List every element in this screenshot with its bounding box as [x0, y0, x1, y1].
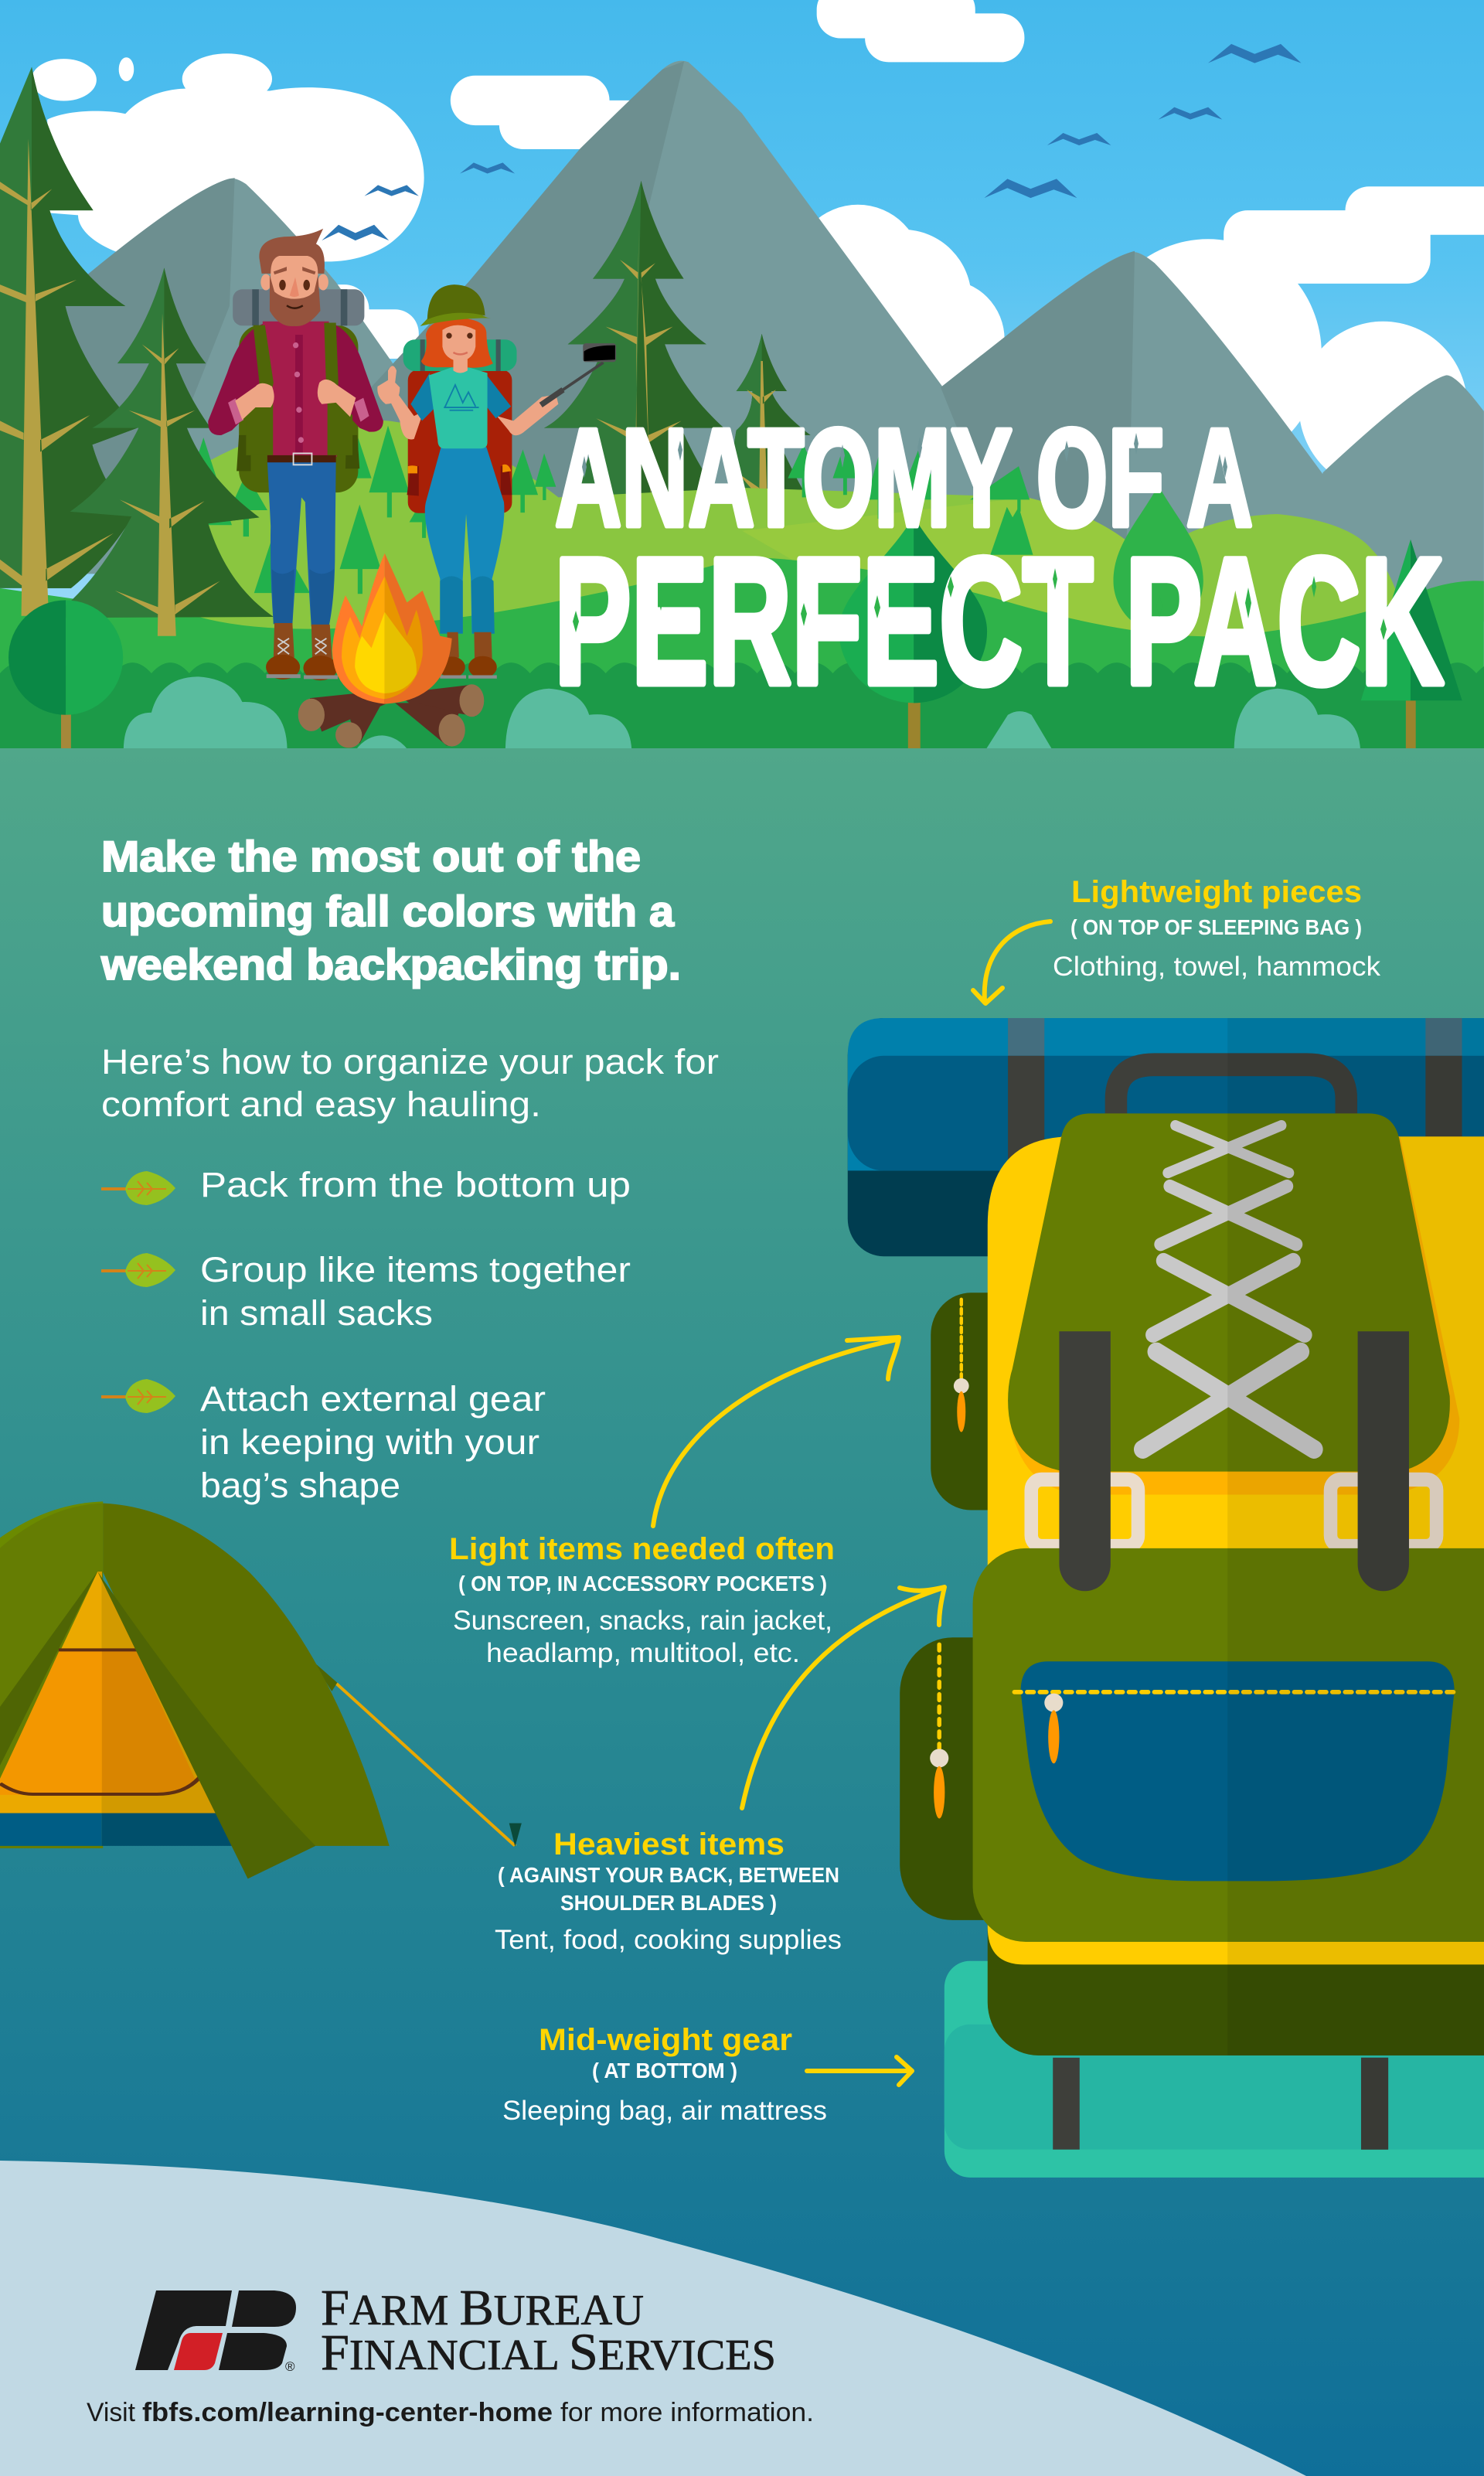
woman t-shirt [410, 367, 511, 448]
hero scene [0, 0, 1484, 755]
bullet 3 text: bag’s shape [200, 1466, 400, 1505]
hiker: woman [377, 284, 616, 679]
intro heading: Make the most out of the [101, 832, 641, 880]
callout: light items: ( ON TOP, IN ACCESSORY POCKETS ) [458, 1572, 827, 1596]
bullet 3 leaf [101, 1379, 175, 1413]
arrow: lightweight pieces [973, 921, 1050, 1003]
arrow: mid-weight gear [807, 2057, 912, 2085]
tent [0, 1501, 522, 1878]
Farm Bureau wordmark: FINANCIAL SERVICES [321, 2322, 776, 2381]
callout: heaviest items: SHOULDER BLADES ) [560, 1891, 777, 1915]
intro heading: weekend backpacking trip. [100, 940, 681, 989]
bullet 3 text: Attach external gear [200, 1379, 546, 1419]
callout: mid-weight gear: Mid-weight gear [539, 2023, 792, 2057]
intro heading [100, 832, 681, 989]
drop-shaped and triangle trees [839, 485, 1462, 750]
callout: lightweight pieces [1053, 875, 1381, 982]
tent floor [0, 1814, 102, 1846]
man jeans [267, 461, 336, 626]
man forearms, hands and straps [235, 323, 356, 455]
tent guy line and peg [311, 1660, 522, 1847]
footer light curve [0, 2161, 1306, 2476]
man shirt and arms [208, 322, 383, 457]
callout: light items: Light items needed often [449, 1532, 835, 1566]
tent flaps [0, 1572, 315, 1878]
callout: lightweight pieces: Clothing, towel, hammock [1053, 952, 1381, 982]
flap shadow [1010, 1136, 1459, 1494]
log ends [298, 684, 484, 748]
woman boots [439, 632, 497, 679]
mountains [0, 61, 1484, 622]
far pine trees [522, 181, 838, 552]
intro text [101, 1042, 719, 1124]
intro text: comfort and easy hauling. [101, 1085, 541, 1124]
clouds [31, 0, 1484, 492]
sleeping bag mat [945, 1961, 1484, 2178]
arrow: heaviest items [742, 1587, 945, 1808]
man boots [266, 623, 338, 680]
tent body [0, 1501, 103, 1572]
bushes [124, 676, 1360, 750]
woman head [421, 318, 493, 373]
lacing [1143, 1126, 1314, 1449]
arrow: light items [653, 1337, 899, 1526]
pack base [988, 1871, 1484, 2055]
callout: lightweight pieces: ( ON TOP OF SLEEPING BAG ) [1070, 915, 1362, 939]
callout: heaviest items: Tent, food, cooking supplies [495, 1925, 842, 1955]
callout: mid-weight gear: ( AT BOTTOM ) [592, 2059, 737, 2083]
body gradient panel [0, 748, 1484, 2476]
man backpack [239, 325, 358, 492]
bullet 3 text: in keeping with your [200, 1422, 539, 1462]
callout: heaviest items [495, 1827, 842, 1955]
intro text: Here’s how to organize your pack for [101, 1042, 719, 1081]
woman trousers [425, 447, 504, 634]
pine tree second [49, 267, 274, 636]
scalloped shrub line [0, 662, 1484, 755]
Farm Bureau wordmark [321, 2280, 776, 2381]
woman hat [420, 284, 491, 326]
campfire [298, 553, 484, 748]
zip pocket [1014, 1661, 1455, 1881]
callout: mid-weight gear [502, 2023, 827, 2126]
top handle [1116, 1064, 1346, 1126]
footer call to action: for more information. [560, 2398, 814, 2427]
man belt [267, 453, 336, 465]
lower side pocket [900, 1637, 1070, 1920]
pack body [988, 1136, 1484, 1964]
woman backpack [408, 370, 512, 513]
tent doorway [0, 1572, 217, 1814]
intro heading: upcoming fall colors with a [101, 887, 675, 935]
footer call to action: Visit [87, 2398, 136, 2427]
logs [310, 685, 475, 746]
foreground meadow [0, 557, 1484, 755]
callout: heaviest items: ( AGAINST YOUR BACK, BETWEEN [498, 1863, 839, 1887]
legs [1053, 2058, 1388, 2150]
title [554, 400, 1444, 722]
woman arms [388, 392, 558, 439]
hills [180, 420, 1410, 641]
callout: light items: headlamp, multitool, etc. [486, 1638, 800, 1668]
callout: heaviest items: Heaviest items [553, 1827, 785, 1861]
bullet 2 leaf [101, 1253, 175, 1287]
front pocket panel [973, 1548, 1484, 1942]
upper side pocket [931, 1292, 1058, 1510]
bullet 1 leaf [101, 1171, 175, 1205]
callout: lightweight pieces: Lightweight pieces [1071, 875, 1362, 909]
bullet 2 text: in small sacks [200, 1293, 433, 1333]
man head [259, 229, 328, 326]
man side pouches [237, 435, 359, 471]
Farm Bureau logo mark [135, 2290, 296, 2374]
selfie stick and phone [541, 343, 616, 405]
sky [0, 0, 1484, 751]
top flap [1008, 1113, 1450, 1472]
bullet 1 text: Pack from the bottom up [200, 1165, 631, 1204]
Farm Bureau logo mark: ® [285, 2359, 295, 2374]
Farm Bureau wordmark: FARM BUREAU [321, 2280, 644, 2336]
hiker: man [208, 229, 383, 680]
big pine tree left [0, 67, 138, 616]
bullet 2 text [200, 1250, 631, 1333]
flames [332, 553, 385, 704]
bullet 3 text [200, 1379, 546, 1505]
callout: light items: Sunscreen, snacks, rain jacket, [453, 1606, 832, 1636]
backpack illustration [848, 1018, 1484, 2178]
buckles [1031, 1480, 1437, 1546]
man bedroll [233, 289, 364, 325]
woman thumbs-up hand [377, 366, 400, 404]
birds [322, 44, 1302, 240]
small background trees [176, 421, 1033, 594]
footer call to action: fbfs.com/learning-center-home [142, 2398, 553, 2427]
right-side shading [1227, 1018, 1484, 2150]
callout: mid-weight gear: Sleeping bag, air mattress [502, 2096, 827, 2126]
shoulder straps [1059, 1331, 1409, 1591]
rolled pad [848, 1018, 1484, 1256]
footer call to action [87, 2398, 814, 2427]
round tree [9, 600, 123, 750]
woman bedroll [403, 339, 517, 371]
bullet 2 text: Group like items together [200, 1250, 631, 1289]
callout: light items [449, 1532, 835, 1668]
